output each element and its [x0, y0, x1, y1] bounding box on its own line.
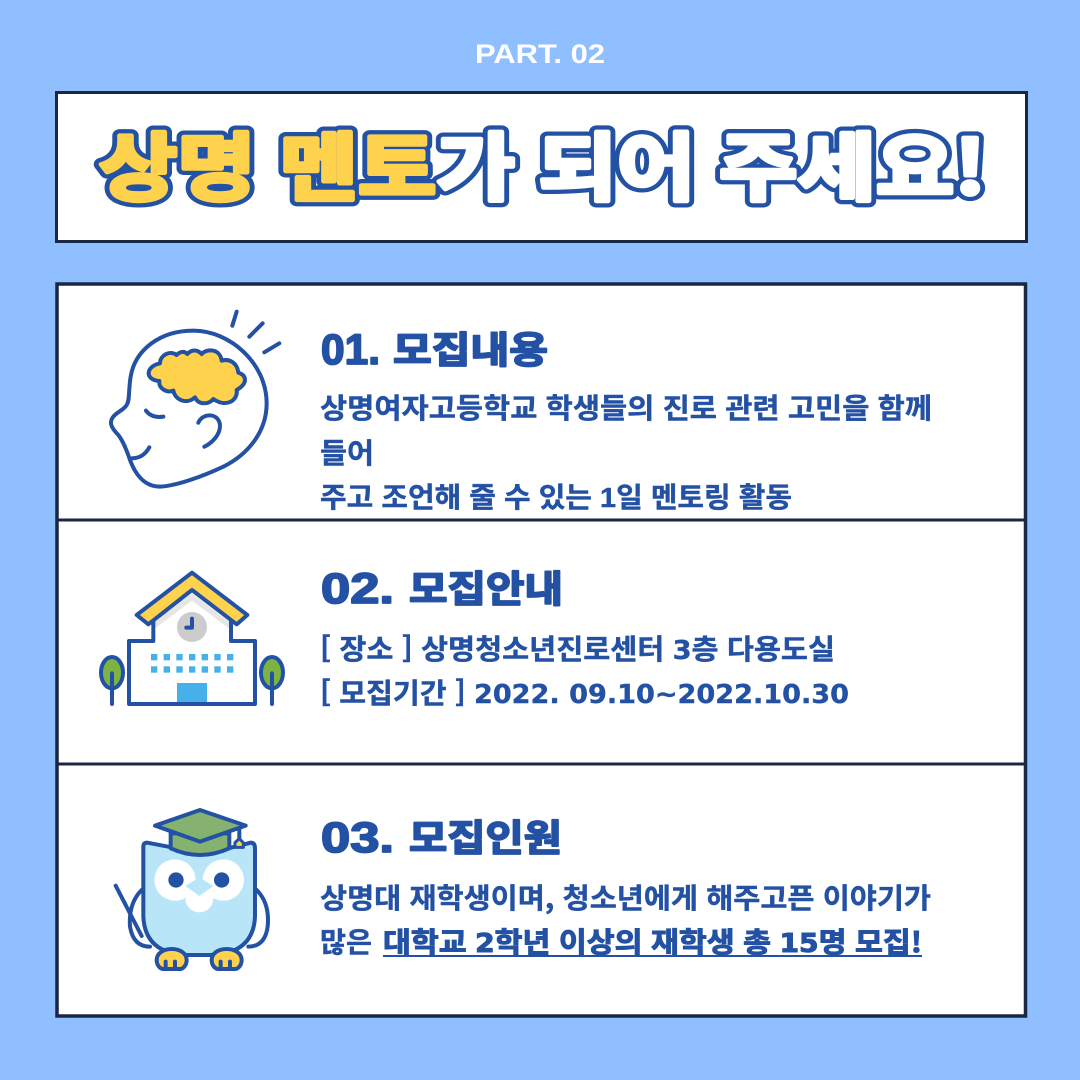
icon: owl with graduation cap — [116, 810, 268, 969]
content panel — [57, 284, 1026, 1016]
text block 02 — [320, 628, 849, 712]
text block 01 — [320, 387, 932, 516]
part label: PART. 02 — [475, 39, 605, 69]
heading 02: 02. — [321, 565, 394, 613]
text block 02: [ 장소 ] 상명청소년진로센터 3층 다용도실 — [320, 628, 835, 668]
text block 01: 들어 — [320, 432, 374, 472]
heading 02 — [321, 559, 563, 613]
heading 03 — [321, 808, 562, 862]
heading 02: 모집안내 — [409, 559, 563, 613]
text block 03 — [320, 877, 931, 961]
heading 01: 모집내용 — [393, 320, 548, 374]
text block 02: [ 모집기간 ] 2022. 09.10~2022.10.30 — [320, 672, 849, 712]
heading 01: 01. — [321, 326, 380, 374]
text block 01: 상명여자고등학교 학생들의 진로 관련 고민을 함께 — [320, 387, 932, 427]
text block 03: 대학교 2학년 이상의 재학생 총 15명 모집! — [383, 921, 922, 961]
heading 03: 모집인원 — [409, 808, 562, 862]
title panel — [56, 92, 1026, 242]
title: 상명 멘토 가 되어 주세요! — [99, 109, 986, 216]
icon: head with brain — [111, 312, 279, 487]
heading 01 — [321, 320, 548, 374]
text block 03: 상명대 재학생이며, 청소년에게 해주고픈 이야기가 — [320, 877, 931, 917]
text block 03: 많은 — [320, 921, 372, 961]
heading 03: 03. — [321, 814, 394, 862]
text block 01: 주고 조언해 줄 수 있는 1일 멘토링 활동 — [320, 476, 792, 516]
title: 상명 멘토가 되어 주세요! — [99, 109, 986, 216]
icon: school — [101, 573, 283, 704]
